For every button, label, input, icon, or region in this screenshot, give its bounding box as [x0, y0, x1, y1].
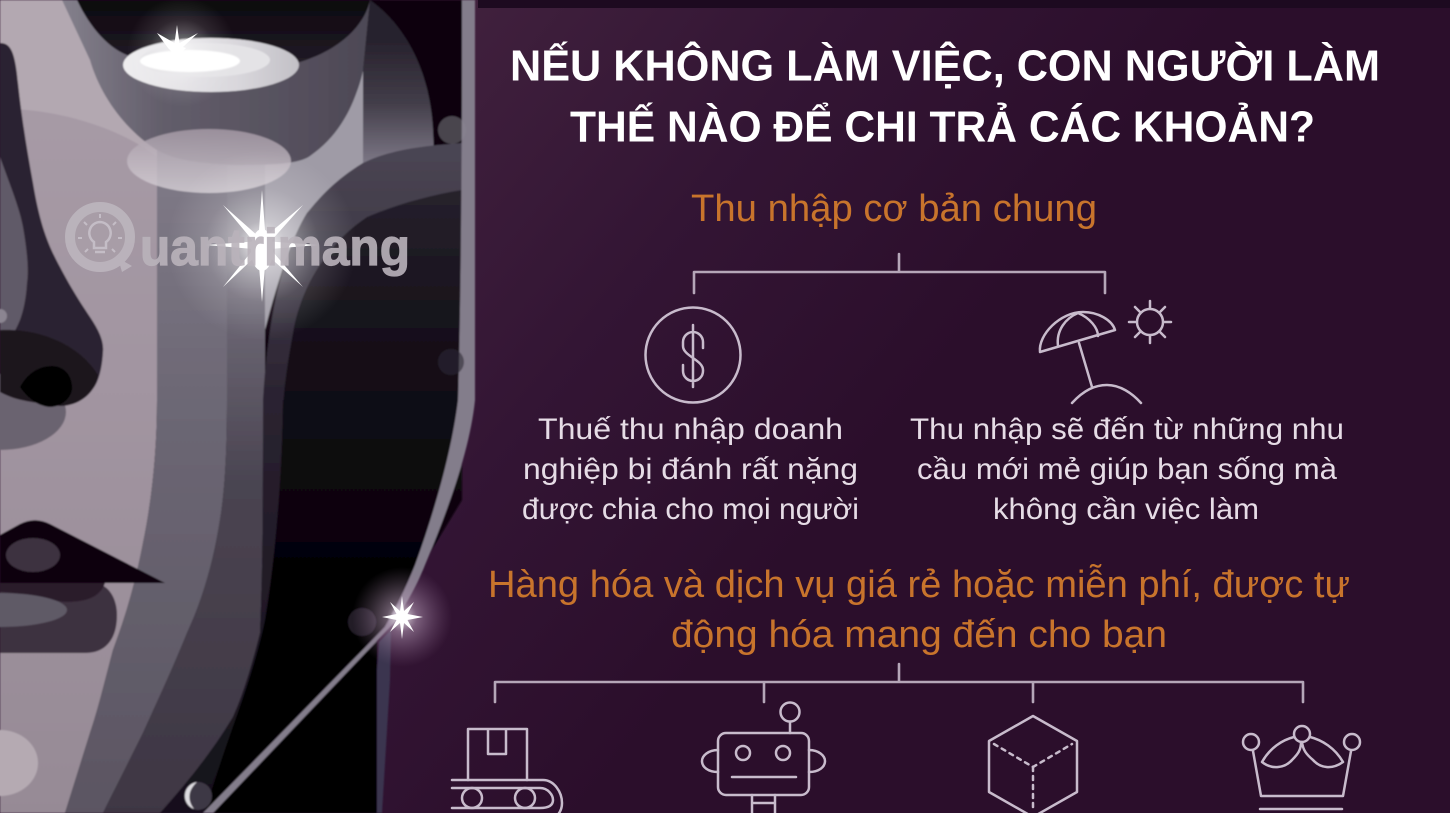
- text: new needs income: [910, 413, 1344, 526]
- watermark: Quantrimang: [70, 207, 410, 277]
- icon: robot: [702, 702, 825, 813]
- title: NẾU KHÔNG LÀM VIỆC, CON NGƯỜI LÀM: [510, 40, 1380, 90]
- title: THẾ NÀO ĐỂ CHI TRẢ CÁC KHOẢN?: [570, 100, 1315, 152]
- bracket: goods branches: [495, 664, 1303, 702]
- text: corporate tax: nghiệp bị đánh rất nặng: [523, 453, 858, 486]
- text: corporate tax: [522, 413, 859, 526]
- glare: lens sparkles: [127, 0, 452, 667]
- icon: dollar coin: [646, 308, 740, 402]
- icon: beach umbrella and sun: [1040, 301, 1171, 403]
- watermark: Quantrimang: uantrimang: [140, 219, 410, 277]
- bracket: income branches: [694, 254, 1105, 293]
- text: new needs income: cầu mới mẻ giúp bạn sống mà: [917, 453, 1337, 486]
- text: new needs income: không cần việc làm: [993, 493, 1259, 526]
- heading: universal basic income: Thu nhập cơ bản chung: [691, 188, 1097, 230]
- text: corporate tax: được chia cho mọi người: [522, 493, 859, 526]
- icon: conveyor belt: [452, 729, 562, 813]
- heading: cheap or free goods and services: Hàng hóa và dịch vụ giá rẻ hoặc miễn phí, được tự: [488, 563, 1350, 606]
- heading: cheap or free goods and services: [488, 563, 1350, 656]
- icon: 3D cube: [989, 716, 1077, 813]
- title: [510, 40, 1380, 152]
- text: corporate tax: Thuế thu nhập doanh: [538, 413, 843, 446]
- text: new needs income: Thu nhập sẽ đến từ những nhu: [910, 413, 1344, 446]
- heading: cheap or free goods and services: động hóa mang đến cho bạn: [671, 614, 1167, 656]
- icon: crown: [1243, 726, 1360, 809]
- illustration: robot face: [0, 0, 475, 813]
